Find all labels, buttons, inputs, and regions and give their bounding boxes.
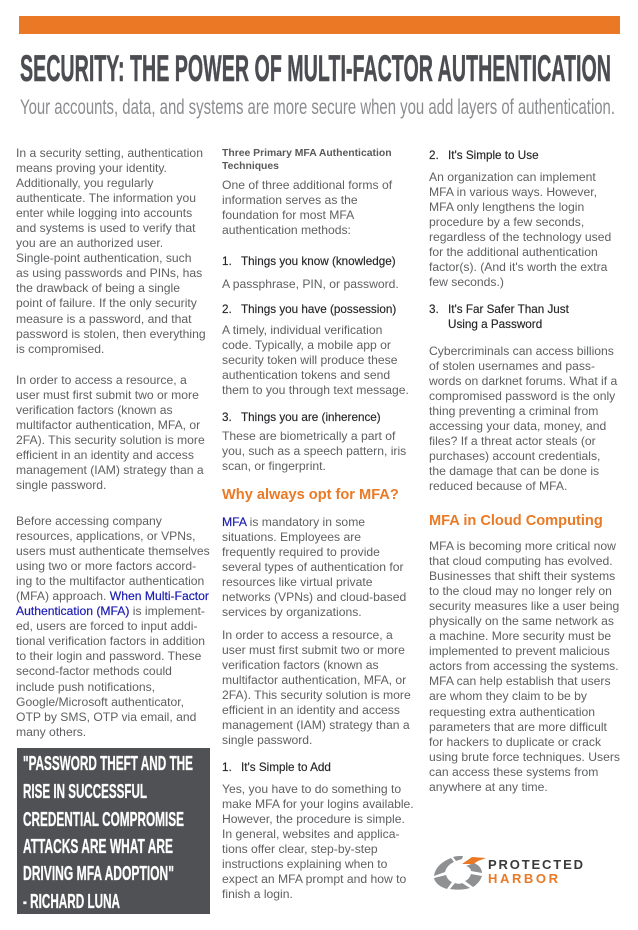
text block: cybercriminals: compromised password is the only xyxy=(429,389,615,403)
text block: access requirements: efficient in an identity and access xyxy=(222,703,400,717)
text block: verification code: authentication tokens and send xyxy=(222,368,390,382)
text block: accessing a resource: In order to access a resource, a xyxy=(16,373,187,387)
text block: three forms of information: One of three additional forms of xyxy=(222,178,392,192)
callout: quote from Richard Luna: - RICHARD LUNA xyxy=(23,891,120,913)
text block: implementation xyxy=(429,170,611,289)
text block: MFA mandatory: MFA is mandatory in some xyxy=(222,515,365,529)
text block: accessing a resource: management (IAM) strategy than a xyxy=(16,463,204,477)
text block: accessing company resources: users must authenticate themselves xyxy=(16,544,210,558)
text block: MFA mandatory xyxy=(222,515,406,619)
text block: implementation: for the additional authentication xyxy=(429,245,598,259)
text block: simple procedure: In general, websites and applica- xyxy=(222,827,400,841)
list item: possession: 2. xyxy=(222,303,232,316)
list item: possession: Things you have (possession) xyxy=(241,303,396,316)
text block: verification code xyxy=(222,323,409,397)
text block: accessing a resource: multifactor authentication, MFA, or xyxy=(16,418,200,432)
text block: simple procedure xyxy=(222,782,414,901)
text block: verification code: them to you through text message. xyxy=(222,383,409,397)
list item: inherence: Things you are (inherence) xyxy=(241,411,381,424)
panel: left column xyxy=(16,146,210,739)
text block: authentication intro: authenticate. The information you xyxy=(16,191,196,205)
text block: verification code: security token will produce these xyxy=(222,353,397,367)
text block: authentication intro: Single-point authentication, such xyxy=(16,251,191,265)
list item: simple to add: It's Simple to Add xyxy=(241,761,331,774)
text block: accessing a resource: 2FA). This security solution is more xyxy=(16,433,205,447)
text block: cloud computing: MFA is becoming more critical now xyxy=(429,539,616,553)
text block: accessing a resource: verification factors (known as xyxy=(16,403,173,417)
text block: accessing a resource xyxy=(16,373,205,492)
text block: accessing a resource: user must first submit two or more xyxy=(16,388,199,402)
text block: authentication intro: point of failure. If the only security xyxy=(16,296,197,310)
list item: simple to use: 2. xyxy=(429,149,439,162)
text block: passphrase: A passphrase, PIN, or password. xyxy=(222,277,399,291)
text block: simple procedure: expect an MFA prompt and how to xyxy=(222,872,406,886)
text block: MFA mandatory: several types of authentication for xyxy=(222,560,404,574)
text block: verification code: A timely, individual verification xyxy=(222,323,382,337)
text block: access requirements: verification factors (known as xyxy=(222,658,379,672)
text block: accessing company resources xyxy=(16,514,210,739)
text block: accessing company resources: include push notifications, xyxy=(16,680,155,694)
text block: cybercriminals: thing preventing a criminal from xyxy=(429,404,598,418)
text block: three forms of information: foundation for most MFA xyxy=(222,208,354,222)
text block: access requirements: user must first submit two or more xyxy=(222,643,405,657)
panel: right column xyxy=(429,149,620,794)
text block: implementation: MFA only lengthens the login xyxy=(429,200,584,214)
list item: knowledge: Things you know (knowledge) xyxy=(241,255,396,268)
text block: cloud computing: requesting extra authentication xyxy=(429,705,595,719)
text block: authentication intro: Additionally, you regularly xyxy=(16,176,153,190)
text block: cloud computing: Businesses that shift their systems xyxy=(429,569,615,583)
text block: access requirements: 2FA). This security solution is more xyxy=(222,688,411,702)
text block: authentication intro: In a security setting, authentication xyxy=(16,146,203,160)
text block: cloud computing: that cloud computing has evolved. xyxy=(429,554,613,568)
text block: accessing company resources: ing to the multifactor authentication xyxy=(16,574,204,588)
list item: far safer: 3. xyxy=(429,303,439,316)
text block: cybercriminals: the damage that can be done is xyxy=(429,464,599,478)
text block: cloud computing: using brute force techniques. Users xyxy=(429,750,620,764)
text block: cloud computing: parameters that are more difficult xyxy=(429,720,607,734)
logo word: Harbor: HARBOR xyxy=(488,871,559,886)
list item: simple to use: It's Simple to Use xyxy=(448,149,539,162)
text block: MFA mandatory: networks (VPNs) and cloud-based xyxy=(222,590,406,604)
text block: MFA mandatory: frequently required to provide xyxy=(222,545,380,559)
text block: biometrics xyxy=(222,429,406,473)
text block: accessing company resources: Before accessing company xyxy=(16,514,162,528)
text block: cybercriminals xyxy=(429,344,618,493)
text block: cybercriminals: purchases) account credentials, xyxy=(429,449,600,463)
text block: accessing company resources: Authentication (MFA) is implement- xyxy=(16,604,205,618)
text block: three forms of information: authentication methods: xyxy=(222,223,351,237)
text block: MFA mandatory: resources like virtual private xyxy=(222,575,372,589)
text block: accessing company resources: Google/Microsoft authenticator, xyxy=(16,695,184,709)
text block: accessing company resources: second-factor methods could xyxy=(16,664,172,678)
panel: middle column xyxy=(222,148,414,901)
text block: cloud computing xyxy=(429,539,620,794)
icon: ring segments xyxy=(434,856,482,890)
list item: knowledge: 1. xyxy=(222,255,232,268)
heading: three primary techniques: Three Primary MFA Authentication xyxy=(222,148,392,159)
text block: access requirements xyxy=(222,628,411,747)
text block: cloud computing: implemented to prevent malicious xyxy=(429,644,610,658)
text block: access requirements: In order to access a resource, a xyxy=(222,628,393,642)
text block: accessing a resource: single password. xyxy=(16,478,106,492)
text block: accessing company resources: tional verification factors in addition xyxy=(16,634,205,648)
text block: cloud computing: for hackers to duplicate or crack xyxy=(429,735,601,749)
list item: inherence: 3. xyxy=(222,411,232,424)
heading: three primary techniques: Techniques xyxy=(222,160,279,172)
text block: biometrics: These are biometrically a part of xyxy=(222,429,395,443)
text block: cybercriminals: accessing your data, money, and xyxy=(429,419,606,433)
text block: authentication intro xyxy=(16,146,206,356)
heading: MFA in cloud computing: MFA in Cloud Computing xyxy=(429,513,603,529)
text block: accessing company resources: many others. xyxy=(16,725,86,739)
text block: simple procedure: However, the procedure is simple. xyxy=(222,812,405,826)
text block: cybercriminals: Cybercriminals can access billions xyxy=(429,344,614,358)
text block: simple procedure: tions offer clear, step-by-step xyxy=(222,842,378,856)
text block: simple procedure: instructions explaining when to xyxy=(222,857,387,871)
logo: Protected Harbor xyxy=(434,856,583,890)
text block: cloud computing: security measures like a user being xyxy=(429,599,619,613)
text block: cybercriminals: words on darknet forums. What if a xyxy=(429,374,617,388)
heading: why always opt for MFA: Why always opt for MFA? xyxy=(222,487,399,503)
text block: three forms of information xyxy=(222,178,392,237)
text block: biometrics: scan, or fingerprint. xyxy=(222,459,326,473)
text block: cloud computing: anywhere at any time. xyxy=(429,780,548,794)
text block: accessing company resources: (MFA) approach. When Multi-Factor xyxy=(16,589,209,603)
text block: authentication intro: is compromised. xyxy=(16,342,104,356)
text block: cloud computing: can access these systems from xyxy=(429,765,598,779)
text block: access requirements: multifactor authentication, MFA, or xyxy=(222,673,406,687)
text block: three forms of information: information serves as the xyxy=(222,193,358,207)
text block: implementation: MFA in various ways. However, xyxy=(429,185,597,199)
text block: authentication intro: password is stolen, then everything xyxy=(16,327,206,341)
text block: cloud computing: physically on the same network as xyxy=(429,614,614,628)
text block: implementation: procedure by a few seconds, xyxy=(429,215,584,229)
callout: quote from Richard Luna xyxy=(17,748,210,914)
text block: accessing company resources: ed, users are forced to input addi- xyxy=(16,619,198,633)
text block: cloud computing: a machine. More security must be xyxy=(429,629,611,643)
text block: authentication intro: means proving your identity. xyxy=(16,161,167,175)
text block: accessing a resource: efficient in an identity and access xyxy=(16,448,194,462)
text block: verification code: code. Typically, a mobile app or xyxy=(222,338,391,352)
text block: cybercriminals: reduced because of MFA. xyxy=(429,479,567,493)
text block: cloud computing: MFA can help establish that users xyxy=(429,674,611,688)
text block: authentication intro: measure is a password, and that xyxy=(16,312,191,326)
text block: accessing company resources: to their login and password. These xyxy=(16,649,201,663)
text block: cloud computing: are whom they claim to be by xyxy=(429,689,587,703)
text block: implementation: factor(s). (And it's worth the extra xyxy=(429,260,607,274)
list item: simple to add: 1. xyxy=(222,761,232,774)
text block: implementation: few seconds.) xyxy=(429,275,504,289)
text block: simple procedure: make MFA for your logins available. xyxy=(222,797,414,811)
text block: accessing company resources: resources, applications, or VPNs, xyxy=(16,529,196,543)
list item: far safer: It's Far Safer Than Just xyxy=(448,303,569,316)
heading: three primary techniques xyxy=(222,148,392,172)
logo word: Protected: PROTECTED xyxy=(488,857,583,872)
header banner xyxy=(18,16,620,34)
text block: authentication intro: the drawback of being a single xyxy=(16,281,180,295)
text block: simple procedure: finish a login. xyxy=(222,887,293,901)
text block: MFA mandatory: situations. Employees are xyxy=(222,530,361,544)
text block: MFA mandatory: services by organizations. xyxy=(222,605,362,619)
text block: simple procedure: Yes, you have to do something to xyxy=(222,782,401,796)
text block: authentication intro: enter while logging into accounts xyxy=(16,206,192,220)
icon: orange swoosh xyxy=(462,857,486,864)
text block: authentication intro: you are an authorized user. xyxy=(16,236,163,250)
text block: cloud computing: to the cloud may no longer rely on xyxy=(429,584,612,598)
list item: far safer xyxy=(429,303,569,331)
text block: cloud computing: actors from accessing the systems. xyxy=(429,659,619,673)
text block: accessing company resources: using two or more factors accord- xyxy=(16,559,196,573)
text block: cybercriminals: files? If a threat actor steals (or xyxy=(429,434,596,448)
text block: access requirements: management (IAM) strategy than a xyxy=(222,718,410,732)
text block: implementation: An organization can implement xyxy=(429,170,596,184)
text block: biometrics: you, such as a speech pattern, iris xyxy=(222,444,406,458)
text block: cybercriminals: of stolen usernames and pass- xyxy=(429,359,595,373)
text block: access requirements: single password. xyxy=(222,733,312,747)
text block: implementation: regardless of the technology used xyxy=(429,230,611,244)
text block: authentication intro: as using passwords and PINs, has xyxy=(16,266,202,280)
text block: accessing company resources: OTP by SMS, OTP via email, and xyxy=(16,710,196,724)
list item: far safer: Using a Password xyxy=(448,318,542,331)
text block: authentication intro: and systems is used to verify that xyxy=(16,221,196,235)
